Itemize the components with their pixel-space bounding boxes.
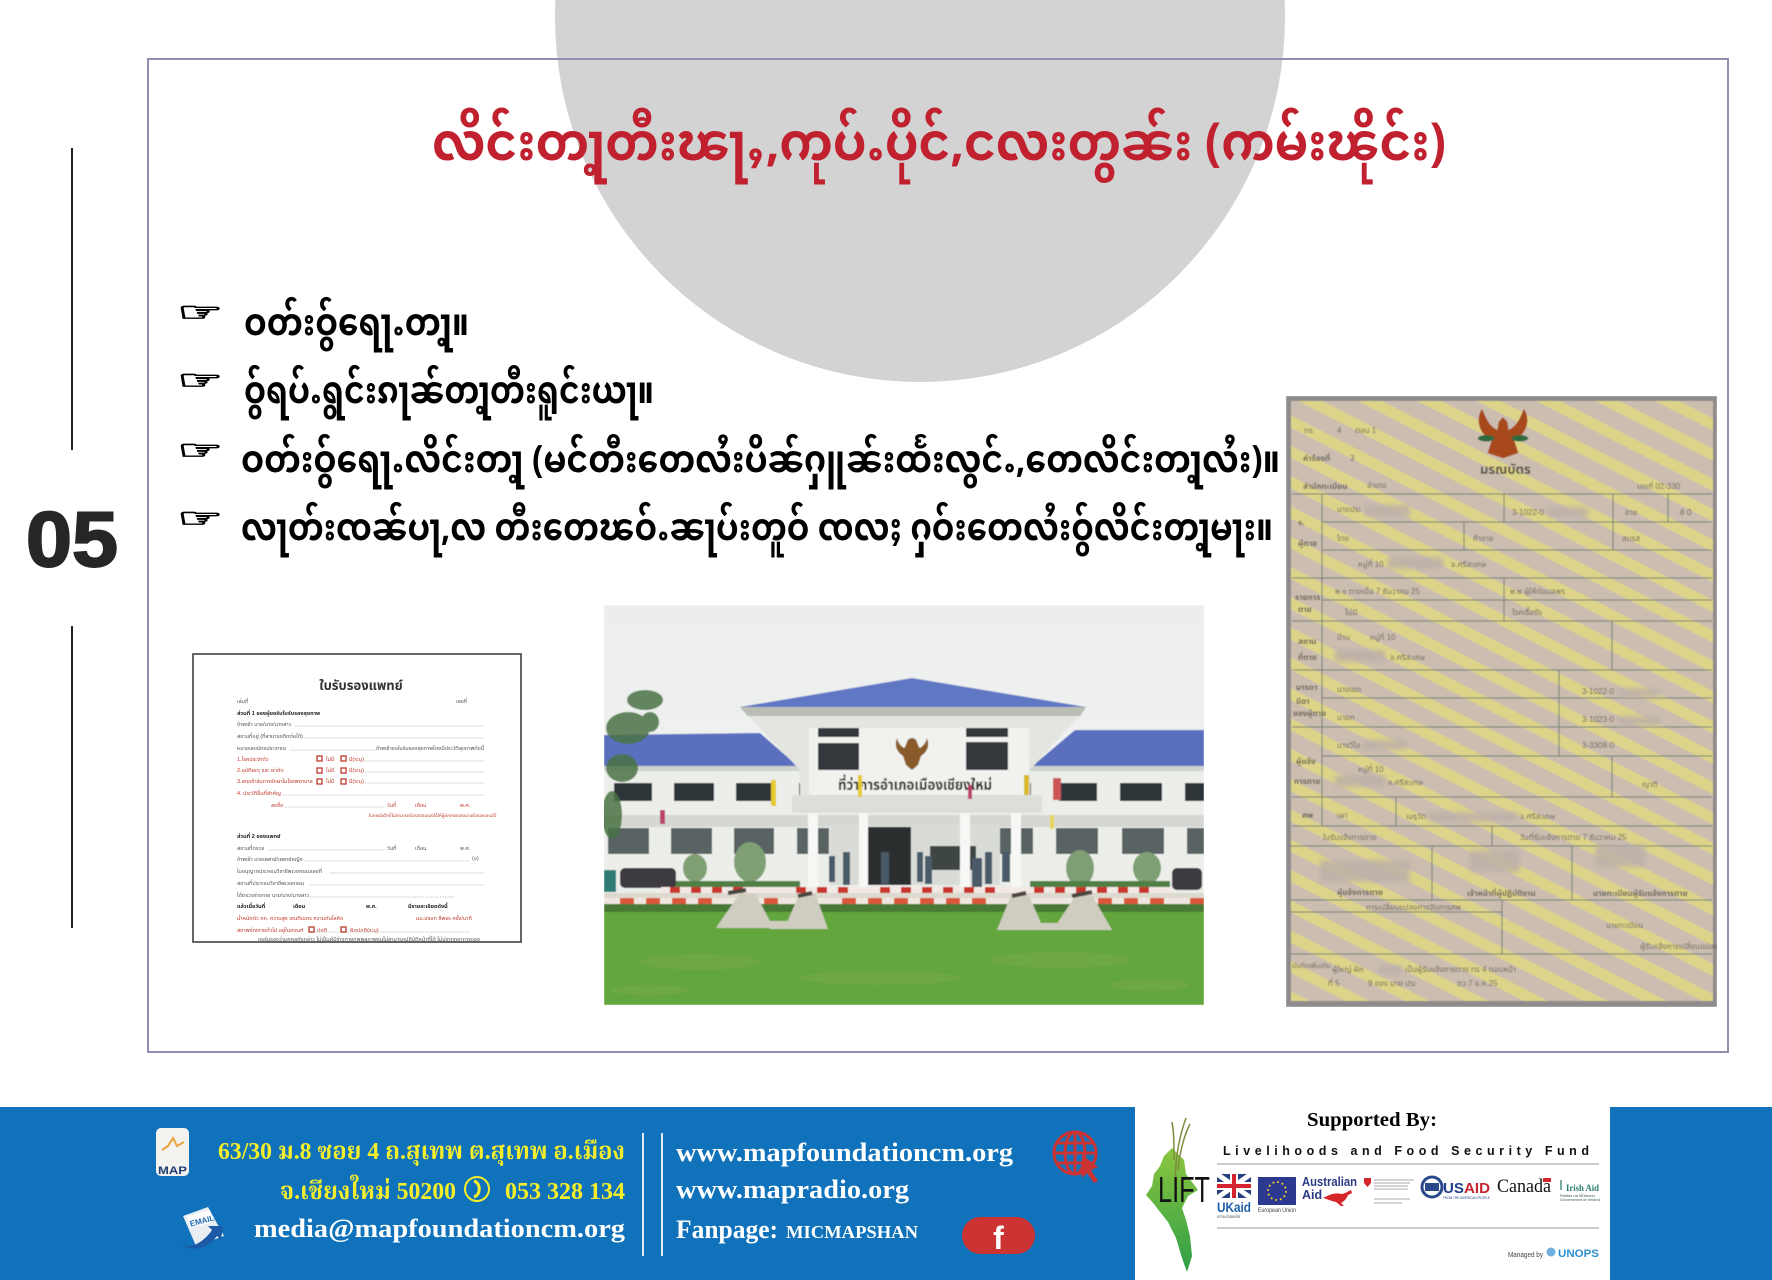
Swiss aid logo (1364, 1178, 1414, 1203)
form text rows: ข้าพเจ้า นายแพทย์/แพทย์หญิง (237, 856, 303, 863)
people (828, 852, 1010, 888)
supporters panel (1146, 1109, 1600, 1272)
form text rows: เลขที่ (456, 697, 467, 705)
EU logo: European Union (1258, 1208, 1296, 1214)
MAP logo: MAP (158, 1165, 187, 1177)
USAID logo: USAID (1443, 1180, 1490, 1197)
UNOPS credit: Managed by (1508, 1252, 1543, 1259)
form text rows: แล้วเมื่อวันที่ (237, 902, 266, 910)
garuda emblem (896, 738, 928, 770)
form text rows: สถานที่อยู่ (ที่สามารถติดต่อได้) (237, 732, 303, 740)
content frame (148, 59, 1728, 1052)
form text rows: พ.ศ. (460, 846, 471, 852)
upper windows (614, 783, 1204, 801)
form text rows: ได้ตรวจร่างกาย นาย/นาง/นางสาว (236, 892, 309, 899)
certificate text: จ.ศรีสะเกษ (1451, 559, 1486, 569)
certificate blur patches (1320, 505, 1660, 975)
certificate text: ๑. (1298, 518, 1304, 527)
footer dividers (643, 1133, 662, 1256)
form text rows: พ.ศ. (366, 904, 377, 910)
flags (660, 775, 1061, 829)
Australian Aid logo (1302, 1175, 1357, 1206)
certificate text: เจ้าหน้าที่ผู้ปฏิบัติงาน (1467, 887, 1536, 898)
certificate text: คำร้องที่ (1303, 452, 1330, 463)
certificate text: 3-1022-0 (1582, 687, 1615, 696)
driveway (604, 893, 1204, 899)
certificate text: การเปลี่ยนแปลงการจัดการศพ (1366, 901, 1462, 912)
EU logo (1258, 1177, 1296, 1214)
certificate text: 3-1022-0 (1512, 508, 1545, 517)
bullet 1: ☞ (177, 298, 223, 328)
certificate text: ชาย (1625, 508, 1638, 517)
Australian Aid logo: Australian (1302, 1175, 1357, 1189)
certificate text: การตาย (1294, 777, 1320, 786)
certificate text: หมู่ที่ 10 (1358, 558, 1384, 570)
certificate text: ศพ (1302, 811, 1313, 820)
certificate text: นายประ (1337, 505, 1362, 514)
certificate text: เป็นผู้รับแจ้งการตาย ทร 4 ตอนหน้า (1405, 964, 1516, 975)
fanpage (676, 1215, 918, 1244)
Irish Aid logo: Government of Ireland (1560, 1197, 1600, 1202)
certificate text: หมู่ที่ 10 (1358, 763, 1384, 775)
certificate text: อำเภอ (1367, 481, 1387, 490)
USAID logo (1422, 1177, 1490, 1200)
certificate text: ผู้แจ้งการตาย (1337, 887, 1383, 897)
UK aid logo (1217, 1174, 1251, 1219)
phone icon (465, 1177, 489, 1201)
address: 63/30 ม.8 ซอย 4 ถ.สุเทพ ต.สุเทพ อ.เมือง (218, 1138, 625, 1166)
form text rows: เล่มที่ (237, 697, 248, 705)
certificate text: นายทะเบียน (1606, 920, 1643, 930)
form text rows: หมายเลขบัตรประชาชน (237, 745, 286, 752)
certificate text: สำนักทะเบียน (1303, 481, 1347, 491)
form text rows: วันที่ (387, 844, 396, 852)
form text rows: เดือน (415, 802, 426, 809)
USAID logo: FROM THE AMERICAN PEOPLE (1443, 1195, 1490, 1200)
flower border (604, 898, 1204, 913)
certificate text (1292, 426, 1718, 988)
certificate text: หมู่ที่ 10 (1370, 631, 1396, 643)
certificate text: ตาย (1298, 605, 1312, 614)
form text rows: 3.เคยเข้ารับการรักษาในโรงพยาบาล (237, 778, 313, 785)
pediment roof (740, 678, 1086, 716)
website 2: www.mapradio.org (676, 1175, 909, 1204)
form text rows: 4. ประวัติอื่นที่สำคัญ (237, 789, 281, 797)
certificate text: 8 ปี (1680, 508, 1692, 517)
title: လိင်းတႃ့တီးၽႃႇ,ကုပ်ႉပိုင်,ငလးတွၼ်း (ကမ်းၽိုင်း) (432, 91, 1446, 205)
form text rows: ลงชื่อ (271, 801, 283, 809)
certificate text: ผู้ตาย (1298, 538, 1317, 548)
form text rows: ส่วนที่ 1 ของผู้ขอรับใบรับรองสุขภาพ (237, 709, 320, 717)
certificate text: บ้าน (1337, 632, 1350, 642)
centre windows (818, 728, 1008, 770)
email icon: EMAIL (189, 1213, 215, 1229)
photo: district office building (602, 605, 1204, 1005)
certificate text: เลขที่ 02-330 (1637, 480, 1681, 491)
certificate text: สมรส (1622, 534, 1640, 543)
facebook button (962, 1217, 1035, 1256)
certificate text: 3-3308-0 (1582, 741, 1615, 750)
medical certificate form (193, 654, 521, 943)
form text rows: สภาพร่างกายทั่วไป อยู่ในเกณฑ์ (237, 926, 303, 934)
globe icon (1054, 1132, 1098, 1183)
form text rows: 1.โรคประจำตัว (237, 756, 269, 763)
form text rows: ไม่มี (325, 778, 334, 785)
photo: death certificate (1286, 396, 1718, 1007)
certificate text: มรณบัตร (1480, 462, 1531, 477)
certificate text: เผา (1337, 811, 1348, 820)
form text rows (236, 697, 497, 943)
Irish Aid logo (1560, 1180, 1600, 1202)
website 1: www.mapfoundationcm.org (676, 1138, 1013, 1167)
certificate text: เมรุวัด (1406, 812, 1426, 821)
certificate text: สถาน (1298, 637, 1316, 646)
certificate table lines (1290, 494, 1712, 954)
certificate text: รายการ (1295, 593, 1320, 602)
certificate text: ทร. (1304, 426, 1315, 435)
motorbikes (604, 868, 1202, 892)
certificate text: โรคเรื้อรัง (1512, 606, 1542, 617)
certificate text: ญาติ (1642, 780, 1658, 789)
form text rows: ไม่มี (325, 767, 334, 774)
sign lettering: ที่ว่าการอำเภอเมืองเชียงใหม่ (838, 774, 992, 794)
certificate text: 3-1023-0 (1582, 715, 1615, 724)
supported by heading: Supported By: (1307, 1109, 1437, 1131)
bullet 1 (177, 285, 469, 368)
form text rows: สถานที่ประกอบวิชาชีพเวชกรรม (237, 879, 304, 887)
UNOPS credit: UNOPS (1558, 1248, 1599, 1260)
decorative grey circle (555, 0, 1285, 382)
certificate text: วันที่รับแจ้งการตาย 7 ธันวาคม 25 (1520, 831, 1627, 842)
certificate text: จ.ศรีสะเกษ (1390, 652, 1425, 662)
certificate garuda emblem (1478, 409, 1528, 458)
certificate text: จ.ศรีสะเกษ (1520, 811, 1555, 821)
bullet 4: ☞ (177, 504, 223, 534)
certificate text: ผู้รับแจ้งการเปลี่ยนแปลง (1640, 940, 1718, 952)
wing walls (604, 765, 1204, 871)
form text rows: มี(ระบุ) (349, 778, 364, 785)
certificate text: ตว.7 ธ.ค.25 (1457, 979, 1498, 988)
form text rows: มี(ระบุ) (349, 756, 364, 763)
certificate text: ไม่มี (1344, 607, 1357, 617)
certificate text: บิดา (1296, 697, 1310, 706)
facebook button: f (993, 1220, 1004, 1256)
bullet list (177, 285, 1280, 573)
MAP logo (156, 1128, 189, 1177)
certificate text: 4 (1337, 426, 1342, 435)
canopy and central block (748, 715, 1080, 813)
form text rows: ส่วนที่ 2 ของแพทย์ (237, 832, 281, 840)
certificate text: ที่ตาย (1298, 651, 1317, 662)
shrubs (660, 842, 1170, 887)
form text rows: ในกรณีเด็กที่ไม่สามารถรับรองตนเองได้ให้ผู้ปกครองลงนามรับรองแทนได้ (369, 812, 497, 819)
form text rows: วันที่ (387, 801, 396, 809)
form text rows: ข้าพเจ้าขอใบรับรองสุขภาพโดยมีประวัติสุขภาพดังนี้ (376, 744, 484, 752)
entrance (830, 825, 1000, 885)
form text rows: เดือน (293, 903, 306, 910)
certificate text: นายทะเบียนผู้รับแจ้งการตาย (1593, 888, 1688, 898)
form text rows: น้ำหนักตัว กก. ความสูง เซนติเมตร ความดันโลหิต (237, 914, 344, 922)
form heading: ใบรับรองแพทย์ (319, 678, 403, 693)
Australian Aid logo: Aid (1302, 1188, 1322, 1202)
UK aid logo: UKaid (1217, 1199, 1251, 1215)
lower windows with bars (608, 828, 1204, 854)
form text rows: ปกติ (317, 928, 328, 934)
city and postcode: จ.เชียงใหม่ 50200 (280, 1174, 456, 1205)
Irish Aid logo: Rialtas na hÉireann (1560, 1193, 1595, 1198)
Irish Aid logo: Irish Aid (1566, 1183, 1599, 1193)
certificate text: 9 ของ นาย ประ (1368, 979, 1417, 988)
cannon plinths (716, 890, 1112, 930)
Canada wordmark: Canada (1497, 1176, 1552, 1197)
certificate text: ตอน 1 (1355, 426, 1377, 435)
form text rows: มีรายละเอียดดังนี้ (408, 902, 449, 910)
UNOPS credit (1508, 1248, 1599, 1260)
columns (808, 813, 1021, 893)
certificate text: ผู้ใหญ่ ฝัก (1332, 964, 1364, 975)
form checkboxes (309, 756, 346, 932)
form text rows: มี(ระบุ) (349, 767, 364, 774)
certificate text: ของผู้ตาย (1293, 708, 1326, 718)
email icon (182, 1207, 224, 1249)
phone number: 053 328 134 (505, 1179, 625, 1205)
tree (602, 690, 663, 839)
bullet 3: ☞ (177, 436, 223, 466)
certificate text: ค้าขาย (1473, 533, 1494, 543)
certificate text: ผู้แจ้ง (1296, 756, 1316, 766)
bullet 2: ဝွ်ရပ်ႉရွင်းၵႃၼ်တႃ့တီးရူင်းယႃ။ (244, 353, 654, 436)
certificate text: นายก (1337, 713, 1355, 722)
certificate text: นางเขต (1337, 685, 1361, 694)
fanpage: Fanpage: (676, 1215, 778, 1244)
certificate text: มารดา (1296, 683, 1317, 692)
certificate text: จ.ศรีสะเกษ (1388, 777, 1423, 787)
form text rows: ไม่มี (325, 756, 334, 763)
email address: media@mapfoundationcm.org (254, 1214, 625, 1243)
certificate text: ที่ 5 (1328, 977, 1340, 988)
bullet 2: ☞ (177, 366, 223, 396)
form text rows: 2.อุบัติเหตุ และ ผ่าตัด (237, 767, 284, 774)
form text rows: สถานที่ตรวจ (237, 844, 264, 852)
section number with side rules: 05 (26, 495, 118, 583)
form dotted rules (268, 726, 485, 932)
certificate text: บันทึกเพิ่มเติม (1292, 960, 1331, 970)
wing roofs (604, 730, 1204, 768)
fanpage: MICMAPSHAN (786, 1222, 918, 1242)
fund name: Livelihoods and Food Security Fund (1223, 1144, 1589, 1158)
form text rows: เดือน (415, 845, 426, 852)
certificate text: ๒.๑ ตายเมื่อ 7 ธันวาคม 25 (1335, 585, 1420, 596)
bullet 4: လႃတ်းၸၼ်ပႃ,လ တီးတေၽဝ်ႉၼႃပ်းတူဝ် ၸလႈ ႁဝ်းတေလႆးဝွ်လိင်းတႃ့မႃး။ (241, 490, 1273, 573)
form text rows: มม.ปรอท ชีพจร ครั้ง/นาที (416, 914, 472, 922)
certificate text: 3 (1350, 454, 1355, 463)
LIFT map logo: LIFT (1158, 1169, 1210, 1210)
certificate text: นางวิไล (1337, 741, 1360, 750)
bullet 1: ဝတ်းဝွ်ရေႃႉတႃ့။ (244, 285, 469, 368)
footer band (0, 1107, 1772, 1280)
certificate text: ใบรับแจ้งการตาย (1323, 832, 1377, 842)
form text rows: ข้าพเจ้า นาย/นาง/นางสาว (237, 721, 292, 728)
form text rows: ผิดปกติ(ระบุ) (350, 928, 379, 934)
form text rows: ใบอนุญาตประกอบวิชาชีพเวชกรรมเลขที่ (237, 867, 322, 875)
bullet 3: ဝတ်းဝွ်ရေႃႉလိင်းတႃ့ (မင်တီးတေလႆးပိၼ်ႁူၼ်းထႅးလွင်ႉ,တေလိင်းတႃ့လႆး)။ (241, 422, 1280, 505)
UK aid logo: ความช่วยเหลือ (1217, 1214, 1241, 1219)
certificate text: ไทย (1336, 534, 1349, 543)
lawn (604, 912, 1204, 1005)
LIFT map logo (1146, 1118, 1210, 1272)
form text rows: พ.ศ. (460, 803, 471, 809)
red and white kerb (661, 887, 1171, 893)
form text rows: (๑) (472, 856, 479, 862)
certificate text: ๒.๒ ผู้ให้ต่อมลพร (1510, 586, 1565, 597)
form text rows: ขอรับรองว่าบุคคลดังกล่าว ไม่เป็นผู้มีร่างกายทุพพลภาพจนไม่สามารถปฏิบัติหน้าที่ได้ ไม่ปรากฏอาการของ (258, 935, 480, 943)
